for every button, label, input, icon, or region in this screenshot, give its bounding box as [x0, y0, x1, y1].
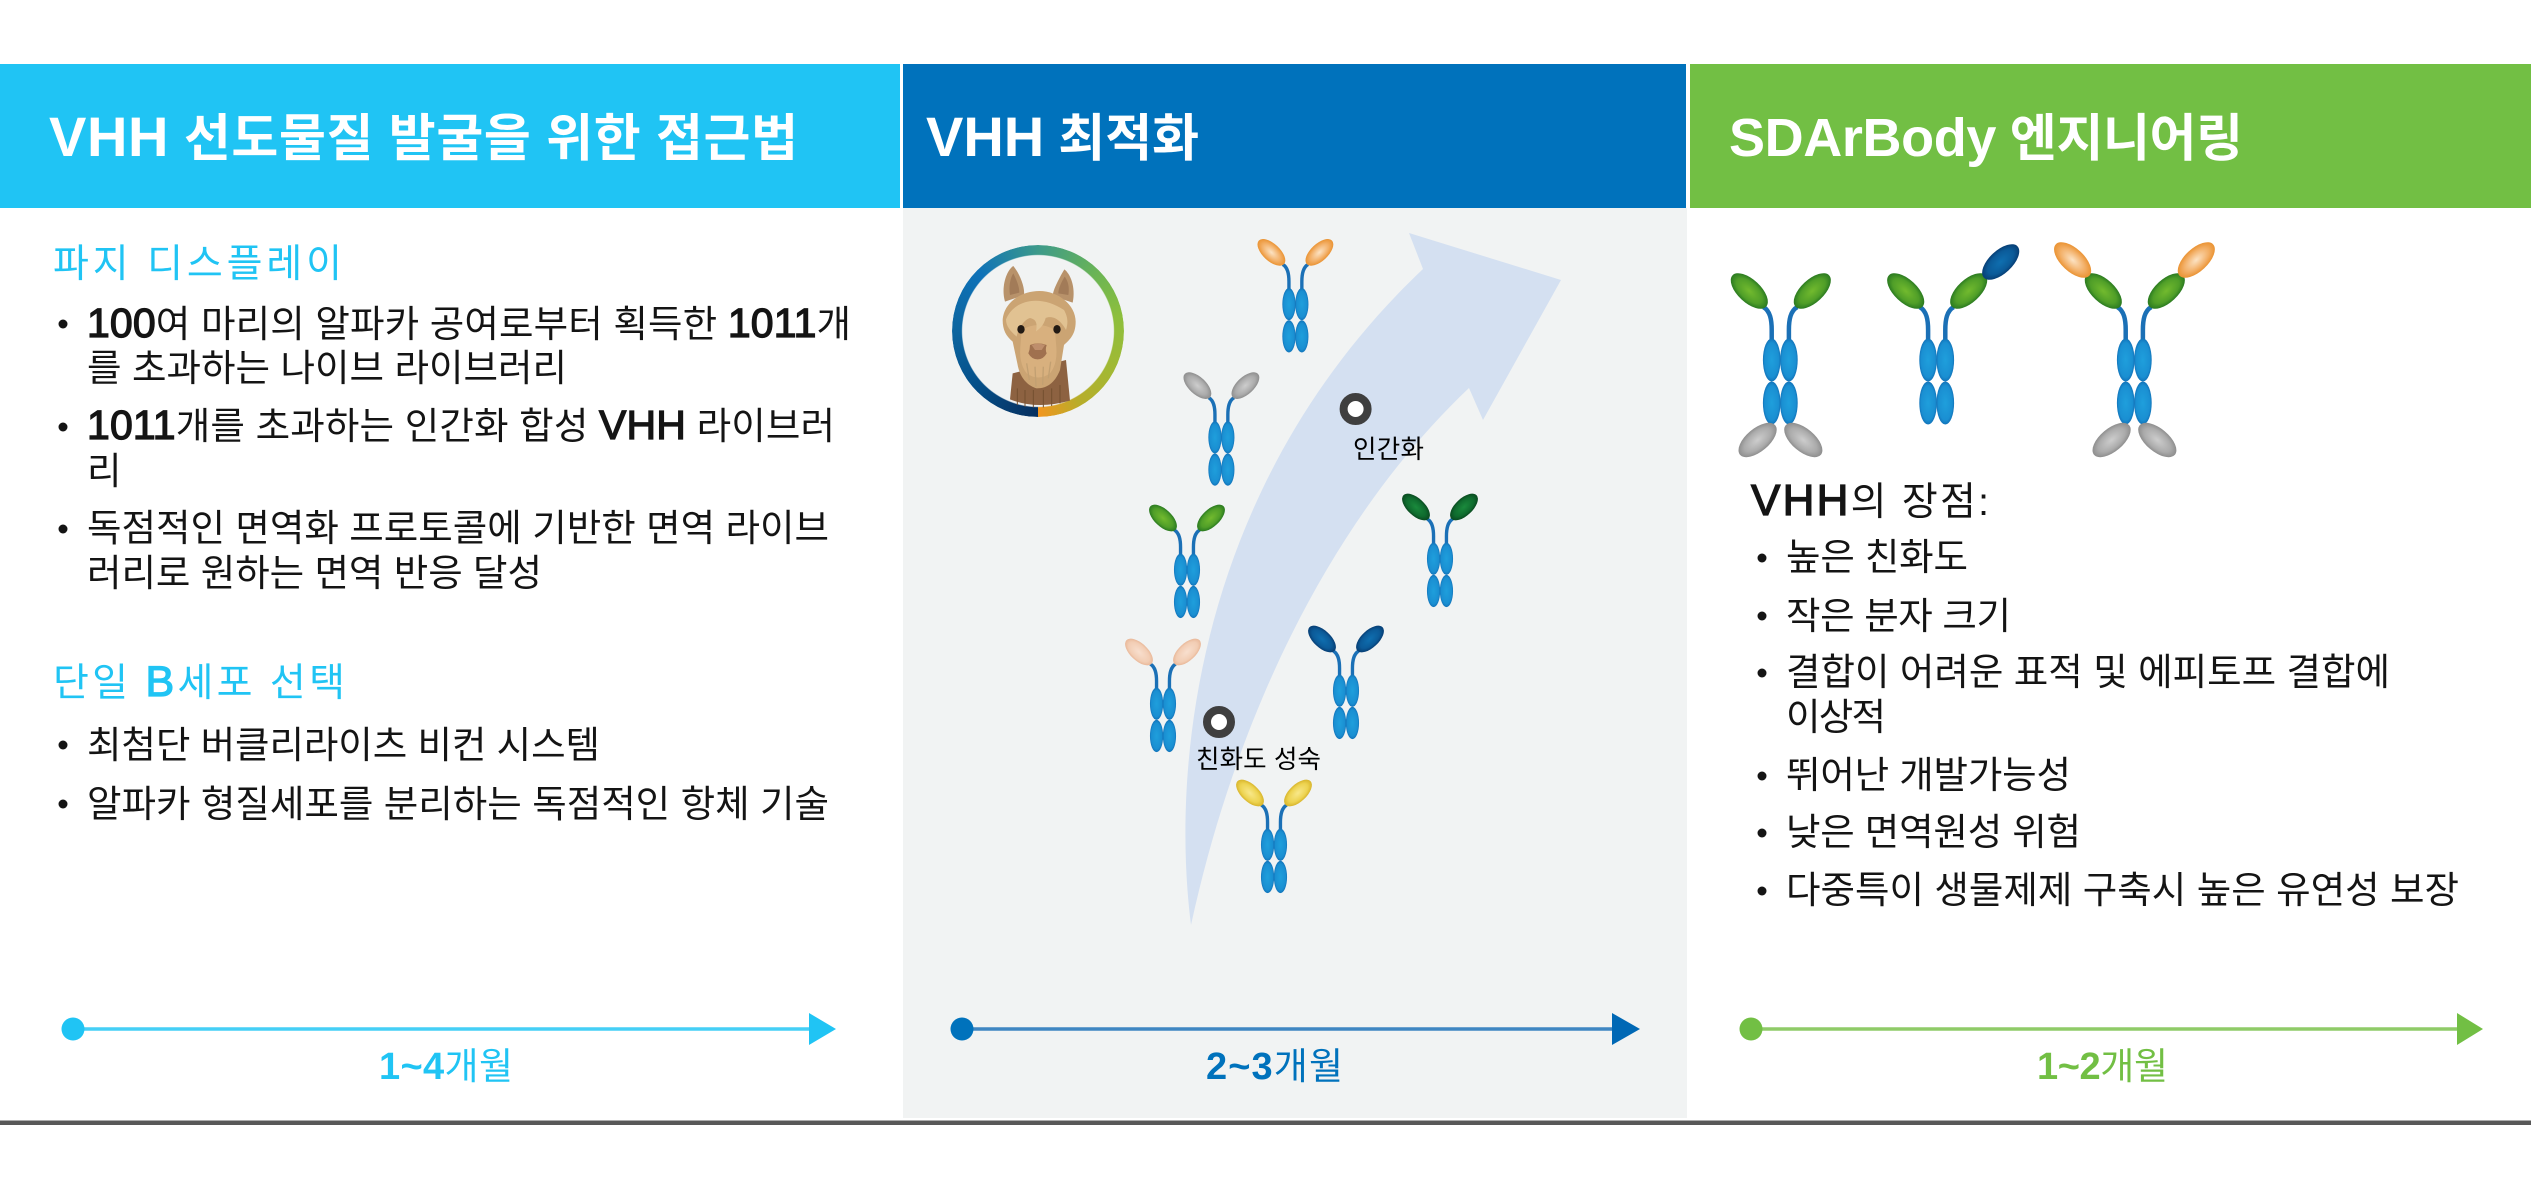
icon: green antibody — [1145, 500, 1229, 618]
bullet list: single B cell: 최첨단 버클리라이츠 비컨 시스템 — [87, 724, 600, 766]
panel: VHH advantages — [1751, 476, 2459, 911]
bullet list: phage display: 1011개를 초과하는 인간화 합성 VHH 라이브러 — [87, 402, 835, 448]
icon: bispecific antibody — [1881, 238, 2025, 424]
marker: humanization: 인간화 — [1353, 436, 1424, 464]
bullet list: advantages: 높은 친화도 — [1786, 536, 1968, 578]
bullet list: phage display: 를 초과하는 나이브 라이브러리 — [87, 347, 567, 389]
marker: humanization — [1344, 397, 1424, 464]
header: SDArBody engineering — [1690, 64, 2531, 208]
icon: yellow antibody — [1232, 775, 1316, 893]
bullet list: single B cell — [58, 724, 829, 825]
timeline: 1 to 4 months — [62, 1013, 836, 1088]
icon: orange antibody — [1253, 234, 1338, 353]
arrow: humanization and affinity maturation — [1185, 233, 1561, 925]
icon: dark green antibody — [1398, 489, 1482, 607]
heading: phage display: 파지 디스플레이 — [53, 243, 342, 286]
timeline: 2 to 3 months: 2~3개월 — [1206, 1046, 1343, 1088]
icon: navy antibody — [1304, 621, 1388, 739]
header: VHH lead discovery: VHH 선도물질 발굴을 위한 접근법 — [49, 105, 798, 168]
heading: single B cell selection: 단일 B세포 선택 — [53, 658, 345, 706]
header: SDArBody engineering: SDArBody 엔지니어링 — [1729, 108, 2243, 168]
header: VHH optimization: VHH 최적화 — [926, 105, 1199, 168]
panel: lead discovery text — [53, 243, 851, 825]
bullet list: advantages: 뛰어난 개발가능성 — [1786, 754, 2071, 796]
bullet list: advantages: 낮은 면역원성 위험 — [1786, 811, 2081, 853]
icon: gray antibody — [1179, 368, 1264, 486]
timeline: 1 to 2 months: 1~2개월 — [2037, 1046, 2168, 1088]
bullet list: phage display: 러리로 원하는 면역 반응 달성 — [87, 552, 542, 594]
bullet list: advantages: 작은 분자 크기 — [1786, 595, 2011, 637]
bullet list: phage display: 독점적인 면역화 프로토콜에 기반한 면역 라이브 — [87, 507, 829, 549]
timeline: 1 to 2 months — [1740, 1013, 2483, 1088]
bullet list: single B cell: 알파카 형질세포를 분리하는 독점적인 항체 기술 — [87, 783, 829, 825]
bullet list: advantages: 다중특이 생물제제 구축시 높은 유연성 보장 — [1786, 869, 2459, 911]
panel background: VHH optimization — [903, 208, 1687, 1118]
icon: pale antibody — [1121, 634, 1205, 752]
timeline: 2 to 3 months — [950, 1013, 1640, 1088]
bullet list: advantages: 이상적 — [1786, 696, 1886, 738]
icon: IgG-VHH antibody — [1725, 267, 1837, 464]
bullet list: phage display — [58, 300, 851, 594]
icon: tetravalent antibody — [2048, 236, 2221, 464]
bullet list: advantages: 결합이 어려운 표적 및 에피토프 결합에 — [1786, 651, 2390, 693]
marker: affinity maturation: 친화도 성숙 — [1196, 746, 1321, 774]
bullet list: advantages — [1758, 536, 2459, 911]
bullet list: phage display: 100여 마리의 알파카 공여로부터 획득한 1011개 — [87, 300, 851, 346]
heading: VHH advantages: VHH의 장점: — [1751, 476, 1989, 525]
header: VHH lead discovery — [0, 64, 900, 208]
icon: alpaca in gradient ring — [952, 245, 1124, 417]
timeline: 1 to 4 months: 1~4개월 — [379, 1046, 513, 1088]
header: VHH optimization — [903, 64, 1686, 208]
marker: affinity maturation — [1196, 710, 1321, 774]
bullet list: phage display: 리 — [87, 450, 122, 492]
